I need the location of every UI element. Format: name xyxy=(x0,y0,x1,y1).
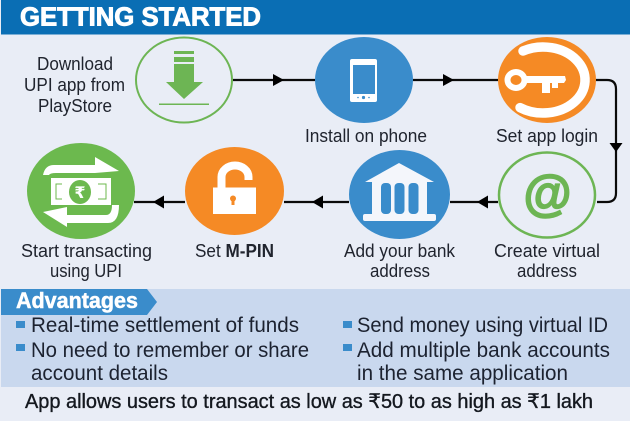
label: set app login: Set app login xyxy=(496,126,598,146)
footer note: App allows users to transact as low as ₹50 to as high as ₹1 lakh xyxy=(25,391,593,413)
advantage: no need to remember xyxy=(16,339,309,385)
label: create virtual address xyxy=(494,241,600,281)
advantage: no need to remember: account details xyxy=(31,362,168,385)
advantage: multiple accounts xyxy=(343,339,610,385)
step 1: download label xyxy=(24,54,125,116)
label: add your bank address xyxy=(344,241,456,281)
advantage: no need to remember: No need to remember or share xyxy=(31,339,309,362)
advantage: multiple accounts: Add multiple bank accounts xyxy=(357,339,610,362)
label: create virtual address: Create virtual xyxy=(494,241,600,261)
label: install on phone: Install on phone xyxy=(305,126,427,146)
label: start transacting using UPI xyxy=(21,241,152,281)
header banner xyxy=(1,0,630,34)
label: start transacting using UPI: Start transacting xyxy=(21,241,152,261)
step 1: download label: Download xyxy=(37,54,113,74)
label: add your bank address: address xyxy=(370,261,430,281)
step 1: download label: PlayStore xyxy=(38,96,112,116)
icon: money transfer: ₹ xyxy=(74,183,86,202)
advantage: multiple accounts: in the same application xyxy=(357,362,568,385)
flow connector arrows xyxy=(134,74,622,208)
panel: advantages xyxy=(1,288,630,387)
icon: phone xyxy=(315,37,413,123)
advantage: send money: Send money using virtual ID xyxy=(357,314,608,337)
title: GETTING STARTED xyxy=(20,2,261,32)
step 1: download label: UPI app from xyxy=(24,75,125,95)
label: start transacting using UPI: using UPI xyxy=(50,261,122,281)
advantage: real-time settlement: Real-time settlement of funds xyxy=(31,314,299,337)
label: set M-PIN: Set M-PIN xyxy=(195,241,274,261)
label: create virtual address: address xyxy=(517,261,577,281)
label: add your bank address: Add your bank xyxy=(344,241,456,261)
icon: money transfer xyxy=(27,143,135,239)
icon: bank xyxy=(349,150,450,239)
icon: download xyxy=(136,38,232,122)
icon: at sign xyxy=(499,152,595,238)
heading tag: advantages: Advantages xyxy=(16,288,138,313)
icon: key xyxy=(498,37,596,123)
icon: at sign: @ xyxy=(524,165,572,221)
icon: open padlock xyxy=(185,147,284,235)
